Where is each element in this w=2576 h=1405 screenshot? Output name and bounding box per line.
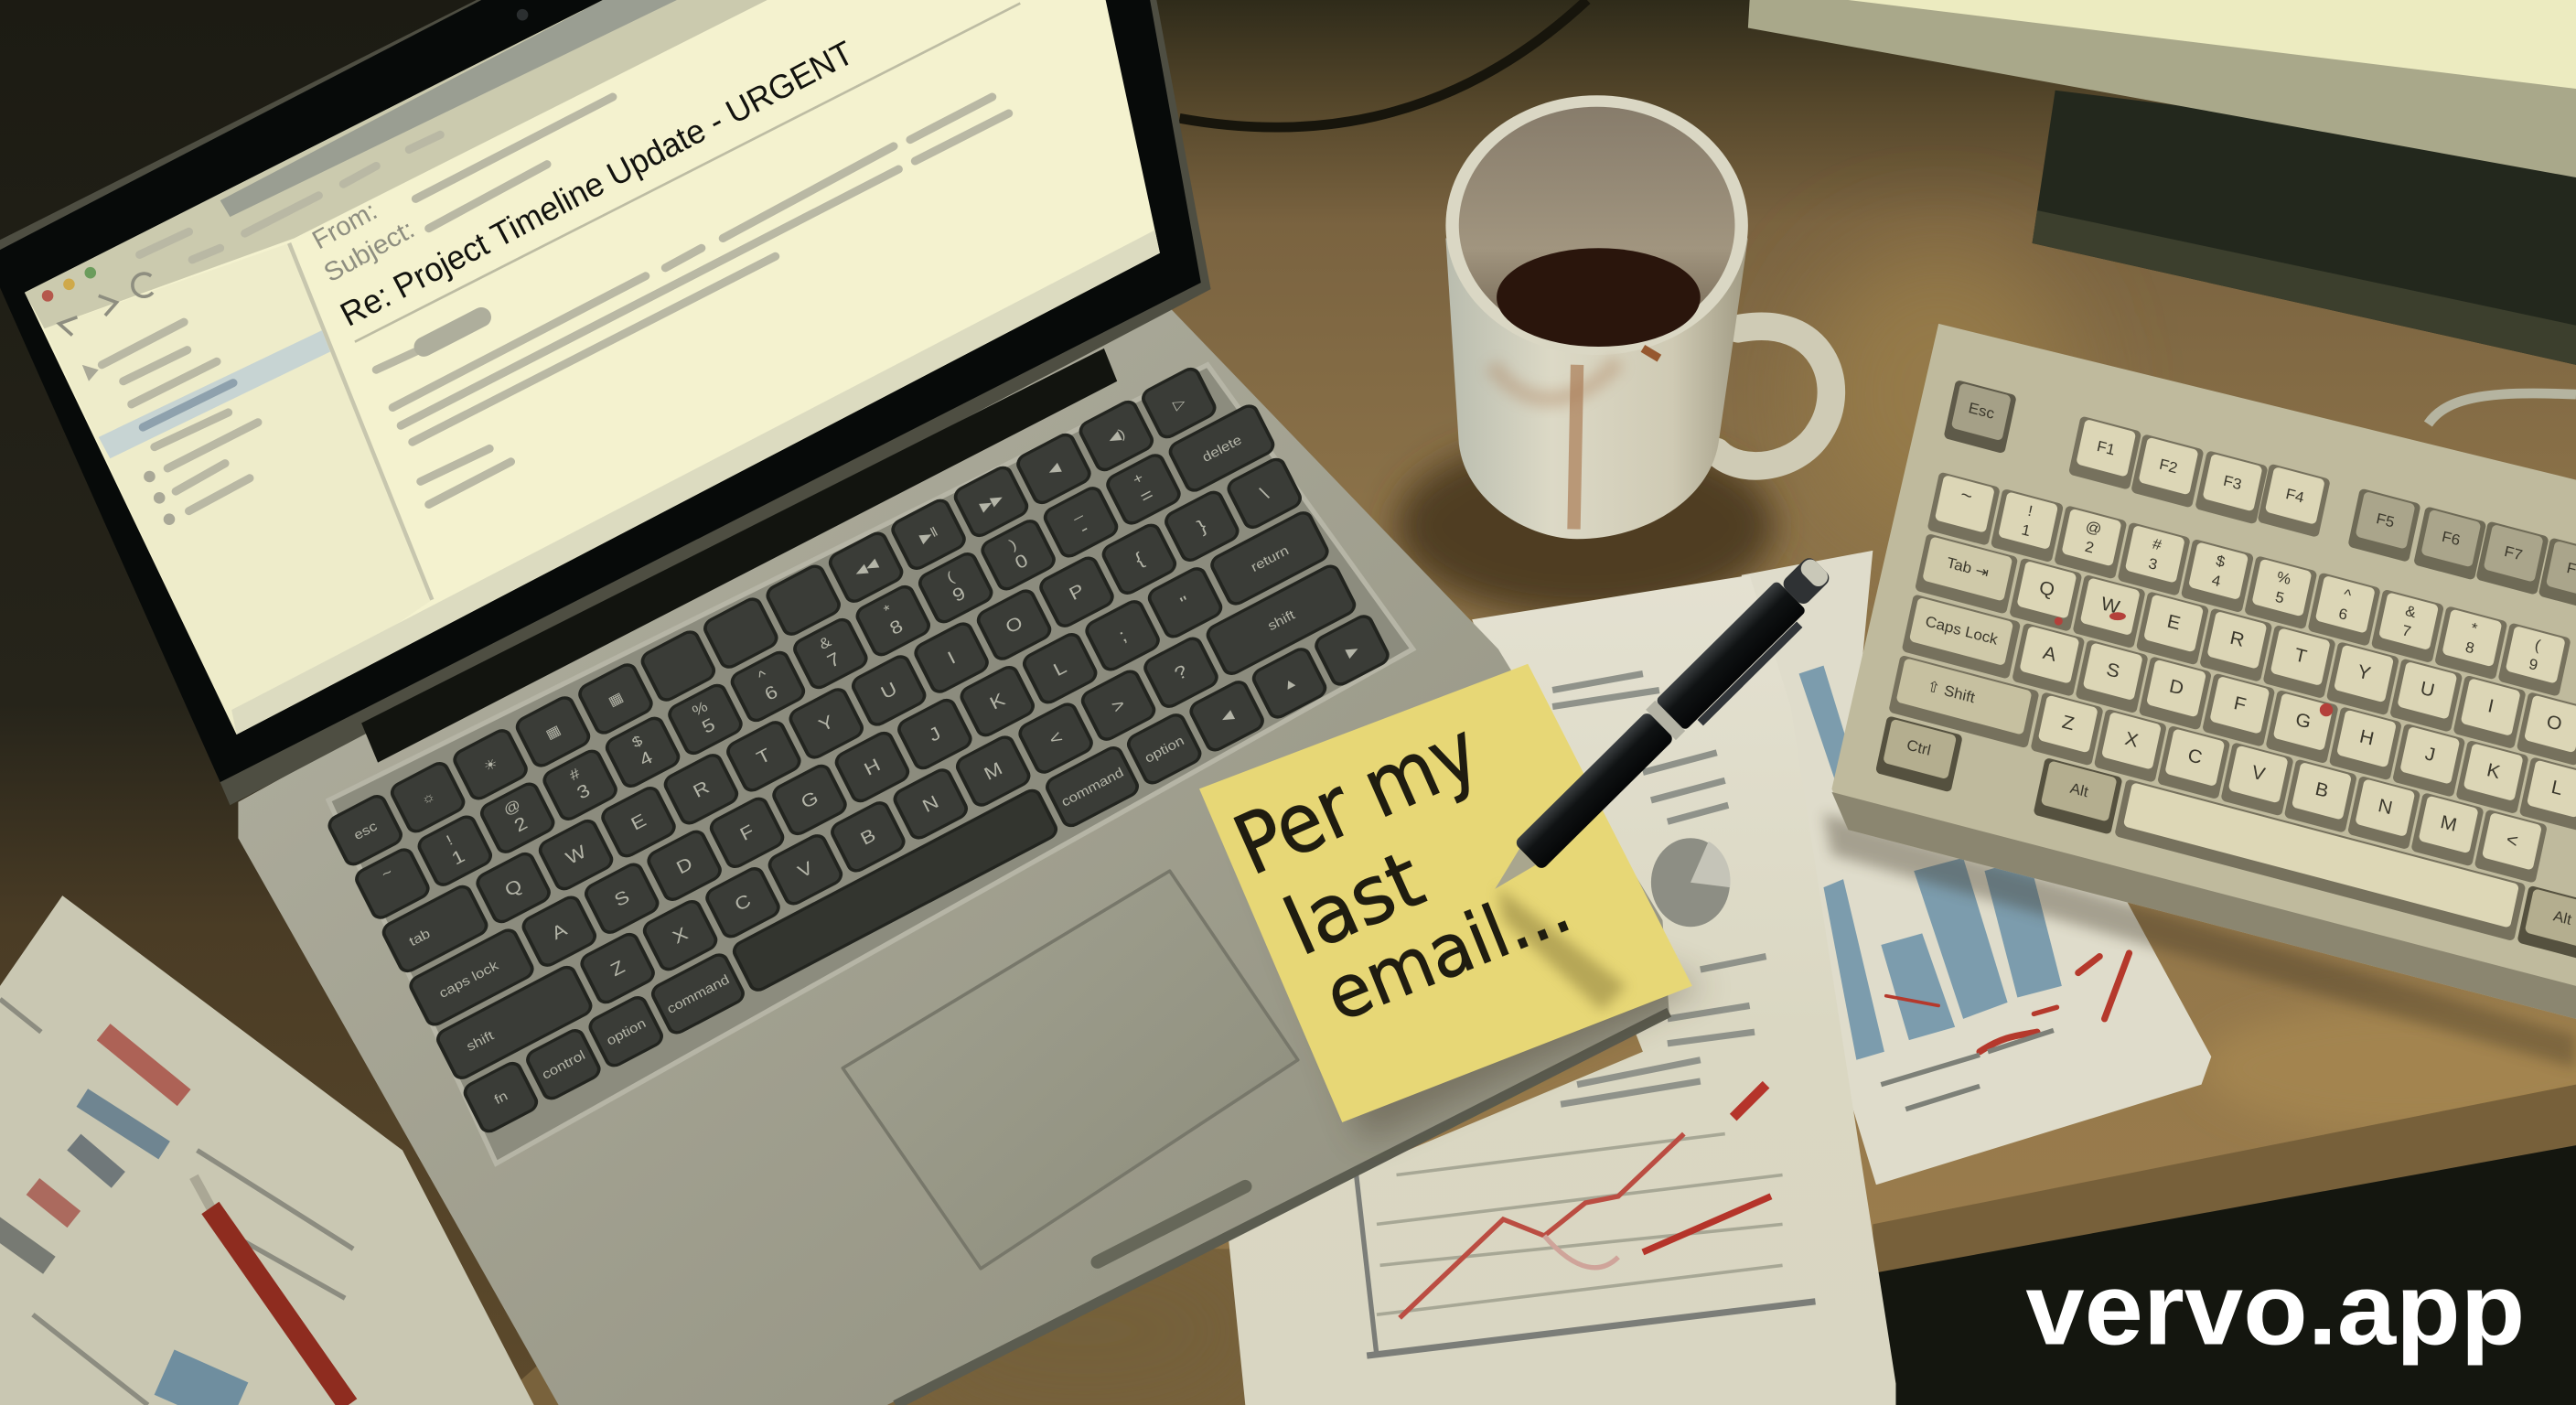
key labels: ) xyxy=(1006,535,1019,552)
key labels: ▶‖ xyxy=(918,525,940,546)
function keys: F5 xyxy=(2375,509,2396,531)
laptop keyboard keys xyxy=(327,346,1390,1134)
keycap labels: Caps Lock xyxy=(1924,613,2000,649)
keyboard well xyxy=(328,365,1412,1164)
toolbar items xyxy=(140,97,613,260)
key labels: ; xyxy=(1115,626,1130,646)
key labels: G xyxy=(798,788,821,813)
email body lines xyxy=(376,97,1009,505)
key labels: ☀ xyxy=(481,756,500,775)
text lines xyxy=(1552,674,1766,1104)
key labels: > xyxy=(1109,693,1129,717)
key labels: command xyxy=(1059,766,1126,810)
key labels: # xyxy=(566,765,583,784)
key labels: 7 xyxy=(824,649,843,671)
key labels: { xyxy=(1132,549,1147,570)
keycap labels: H xyxy=(2357,726,2376,750)
webcam xyxy=(517,9,528,20)
keycap labels: < xyxy=(2505,829,2520,852)
key labels: option xyxy=(1143,734,1186,766)
blue bars xyxy=(1799,666,2062,1060)
keycap labels: K xyxy=(2485,760,2502,783)
brand wordmark: vervo.app xyxy=(2025,1252,2525,1367)
key labels: shift xyxy=(465,1028,497,1055)
key labels: ◀ xyxy=(1218,707,1237,726)
trackpad xyxy=(843,871,1298,1269)
paper with bar chart xyxy=(1742,551,2211,1185)
key labels: L xyxy=(1050,657,1069,681)
keycap labels: I xyxy=(2486,696,2496,717)
function keys: F1 xyxy=(2096,437,2117,458)
function keys: F3 xyxy=(2222,472,2243,493)
keycap labels: X xyxy=(2123,728,2141,752)
keycap labels xyxy=(1897,482,2576,928)
esc key: Esc xyxy=(1967,399,1996,423)
pen shadow on note xyxy=(1498,887,1626,1011)
handwritten note: last xyxy=(1272,833,1436,974)
function keys: F7 xyxy=(2503,542,2524,563)
function keys xyxy=(2068,415,2576,612)
keyboard body xyxy=(1831,324,2576,1019)
pen clip xyxy=(1701,625,1799,723)
key labels: ◀ xyxy=(1046,460,1064,478)
key labels: ! xyxy=(444,831,456,849)
keycap labels: @ xyxy=(2084,518,2103,538)
keycap labels: $ xyxy=(2215,552,2227,571)
subject divider xyxy=(355,4,1020,342)
key labels: U xyxy=(877,678,900,703)
red marks xyxy=(1886,953,2130,1052)
laptop xyxy=(0,0,1669,1405)
key labels: return xyxy=(1249,543,1292,575)
key labels: & xyxy=(816,632,834,653)
coffee stains xyxy=(1573,365,1577,529)
sidebar xyxy=(44,243,432,735)
keycap labels: ( xyxy=(2533,636,2542,654)
sidebar bullets xyxy=(82,365,175,525)
esc key xyxy=(1943,380,2017,454)
key labels: R xyxy=(690,777,713,802)
divider xyxy=(289,243,432,600)
cable behind keyboard xyxy=(2428,393,2576,424)
keycap labels: ^ xyxy=(2342,585,2353,604)
email subject line: Re: Project Timeline Update - URGENT xyxy=(334,34,859,334)
key labels: tab xyxy=(407,927,433,949)
laptop front edge xyxy=(896,1013,1669,1405)
key labels: T xyxy=(754,745,774,768)
keycap labels: ~ xyxy=(1959,484,1974,508)
coffee xyxy=(1497,248,1701,347)
function keys: F6 xyxy=(2441,528,2462,549)
key labels: 4 xyxy=(637,747,656,770)
keycap labels: M xyxy=(2439,811,2459,836)
front notch xyxy=(1098,1186,1245,1262)
keycap labels: Alt xyxy=(2068,779,2090,800)
keycap labels: Tab ⇥ xyxy=(1945,554,1991,582)
key labels: ▶ xyxy=(1344,642,1362,660)
key labels: option xyxy=(605,1016,649,1048)
key labels: shift xyxy=(1266,607,1298,634)
line chart xyxy=(1356,1085,1815,1356)
keycap labels: 4 xyxy=(2210,572,2222,590)
pen cap xyxy=(1780,555,1832,607)
key labels: \ xyxy=(1257,483,1272,504)
keycap labels: D xyxy=(2167,676,2185,700)
function keys: F2 xyxy=(2158,456,2179,477)
bars xyxy=(0,1032,238,1405)
keycap labels: Alt xyxy=(2552,907,2573,928)
key labels: 6 xyxy=(761,681,781,704)
lid bezel xyxy=(0,0,1201,782)
keycap labels: A xyxy=(2041,642,2058,666)
key labels: ▲ xyxy=(1280,674,1300,694)
nav icons xyxy=(59,273,153,335)
key labels: ▷ xyxy=(1171,394,1188,413)
key labels: W xyxy=(563,842,590,869)
key labels: ^ xyxy=(755,666,769,685)
key labels: ▶▶ xyxy=(978,490,1006,514)
key labels: ( xyxy=(944,568,957,585)
keycap labels: 9 xyxy=(2528,655,2539,674)
key labels: P xyxy=(1066,580,1088,605)
keycap labels: 2 xyxy=(2084,538,2096,557)
screen bottom strip xyxy=(231,231,1160,735)
keycap labels: J xyxy=(2423,744,2437,766)
key labels: Q xyxy=(501,875,525,901)
function keys: F4 xyxy=(2284,485,2305,507)
external keyboard xyxy=(1823,324,2576,1068)
key labels: - xyxy=(1077,518,1092,540)
key labels: X xyxy=(670,923,691,948)
key labels: fn xyxy=(492,1089,510,1108)
key labels: * xyxy=(881,601,895,619)
mug shadow xyxy=(1397,435,1775,617)
keycap labels: Q xyxy=(2037,577,2056,601)
key labels: 8 xyxy=(886,616,907,639)
keyboard shadow xyxy=(1823,813,2576,1068)
handwritten note: email... xyxy=(1314,864,1582,1038)
keycap labels: Y xyxy=(2356,661,2373,684)
key labels: ? xyxy=(1171,661,1191,684)
mug handle xyxy=(1717,327,1831,466)
keycap labels: ! xyxy=(2026,502,2034,520)
keycap labels: Ctrl xyxy=(1905,736,1932,759)
keycap labels: 1 xyxy=(2020,521,2032,540)
key labels: N xyxy=(919,791,942,817)
keycap labels: Z xyxy=(2060,712,2077,735)
pie chart xyxy=(1651,838,1731,927)
keycap labels: U xyxy=(2419,678,2436,702)
key labels: esc xyxy=(352,820,380,843)
key labels: control xyxy=(540,1048,587,1082)
keycap labels: B xyxy=(2313,778,2330,802)
pen xyxy=(1480,552,1840,907)
key labels: command xyxy=(665,972,732,1017)
screen xyxy=(25,0,1160,735)
power cable on desk xyxy=(1179,0,1587,127)
laptop deck xyxy=(238,295,1669,1405)
key labels: F xyxy=(736,820,757,845)
keycap labels: R xyxy=(2228,627,2246,651)
key labels: 2 xyxy=(511,813,531,836)
keycap labels: E xyxy=(2165,611,2183,634)
keycap labels: 5 xyxy=(2274,588,2286,606)
key labels: ~ xyxy=(379,863,395,883)
key labels: + xyxy=(1130,468,1146,488)
keycap labels: 6 xyxy=(2337,605,2349,624)
keycap labels: L xyxy=(2549,777,2564,799)
key labels: 1 xyxy=(448,845,468,869)
key labels: I xyxy=(944,648,959,668)
key labels: V xyxy=(795,857,817,882)
keycap labels: C xyxy=(2186,745,2204,768)
keycap labels: G xyxy=(2293,709,2313,733)
key labels: 3 xyxy=(574,780,593,803)
sidebar items xyxy=(102,322,258,511)
mug body xyxy=(1445,238,1748,539)
keycap labels: T xyxy=(2292,645,2309,668)
monitor stand and base xyxy=(1748,0,2576,365)
key labels: ◀) xyxy=(1106,426,1128,447)
key labels: M xyxy=(981,758,1005,784)
main keys xyxy=(1874,471,2576,962)
keycap labels: W xyxy=(2099,594,2121,618)
keycap labels: # xyxy=(2151,535,2163,554)
keycap labels: & xyxy=(2404,602,2418,621)
keycap labels: % xyxy=(2275,568,2292,588)
lines xyxy=(0,999,353,1405)
sidebar highlight xyxy=(99,330,330,458)
red pen xyxy=(194,1176,349,1405)
keycap labels: ⇧ Shift xyxy=(1926,677,1977,706)
lid shell xyxy=(0,0,1211,805)
email subject label: Subject: xyxy=(319,215,420,288)
keycap labels: O xyxy=(2545,711,2564,735)
desk front edge and dark floor xyxy=(1872,1085,2576,1405)
key labels: " xyxy=(1177,592,1193,614)
key labels: @ xyxy=(500,796,523,819)
key labels: A xyxy=(549,919,571,944)
browser toolbar xyxy=(25,0,767,328)
key labels: delete xyxy=(1200,433,1244,466)
keycap labels: 3 xyxy=(2147,554,2159,574)
key labels: % xyxy=(690,698,710,720)
key labels: O xyxy=(1003,612,1026,638)
keycap labels: N xyxy=(2377,795,2394,819)
key labels: ◀◀ xyxy=(853,556,881,580)
key labels: ▦ xyxy=(606,690,626,710)
keycap labels: S xyxy=(2105,660,2121,682)
key labels: S xyxy=(611,886,633,911)
paper with line chart and pie xyxy=(1228,575,1895,1405)
key labels: _ xyxy=(1067,501,1084,521)
red smudges on keys xyxy=(2055,612,2333,716)
key labels: J xyxy=(926,723,944,745)
keycap labels: V xyxy=(2250,762,2267,785)
sticky note xyxy=(1199,664,1692,1122)
key labels: ☼ xyxy=(419,788,438,808)
legend lines xyxy=(1881,1030,2054,1110)
key labels: H xyxy=(861,755,884,779)
email from label: From: xyxy=(307,197,382,255)
key labels: Z xyxy=(607,957,628,981)
key labels: K xyxy=(987,689,1009,713)
key labels: = xyxy=(1137,484,1157,508)
key labels: < xyxy=(1046,726,1066,750)
key labels: $ xyxy=(629,732,646,751)
handwritten note: Per my xyxy=(1221,703,1493,895)
key labels: 5 xyxy=(699,714,718,737)
key labels: 0 xyxy=(1012,550,1031,574)
address strip xyxy=(220,0,677,217)
key labels: E xyxy=(628,810,649,834)
window controls xyxy=(42,267,96,302)
keycap labels: F xyxy=(2232,692,2248,716)
key labels: C xyxy=(732,890,754,916)
key labels: ▦ xyxy=(543,723,564,743)
mug rim and interior xyxy=(1445,95,1748,355)
keycap labels: 8 xyxy=(2463,638,2476,657)
key labels: B xyxy=(857,825,879,849)
key labels xyxy=(352,375,1362,1110)
key labels: caps lock xyxy=(437,959,501,1002)
key labels: D xyxy=(673,853,696,878)
sticky note shadow xyxy=(1249,821,1709,1142)
key labels: } xyxy=(1194,516,1209,537)
handwritten note xyxy=(1221,703,1582,1038)
coffee mug xyxy=(1445,95,1831,539)
paper bottom left with chart xyxy=(0,896,534,1405)
keycap labels: * xyxy=(2469,619,2479,638)
hinge xyxy=(361,349,1117,763)
key labels: Y xyxy=(816,712,837,735)
key labels: 9 xyxy=(950,583,969,606)
keycap labels: 7 xyxy=(2400,622,2412,640)
